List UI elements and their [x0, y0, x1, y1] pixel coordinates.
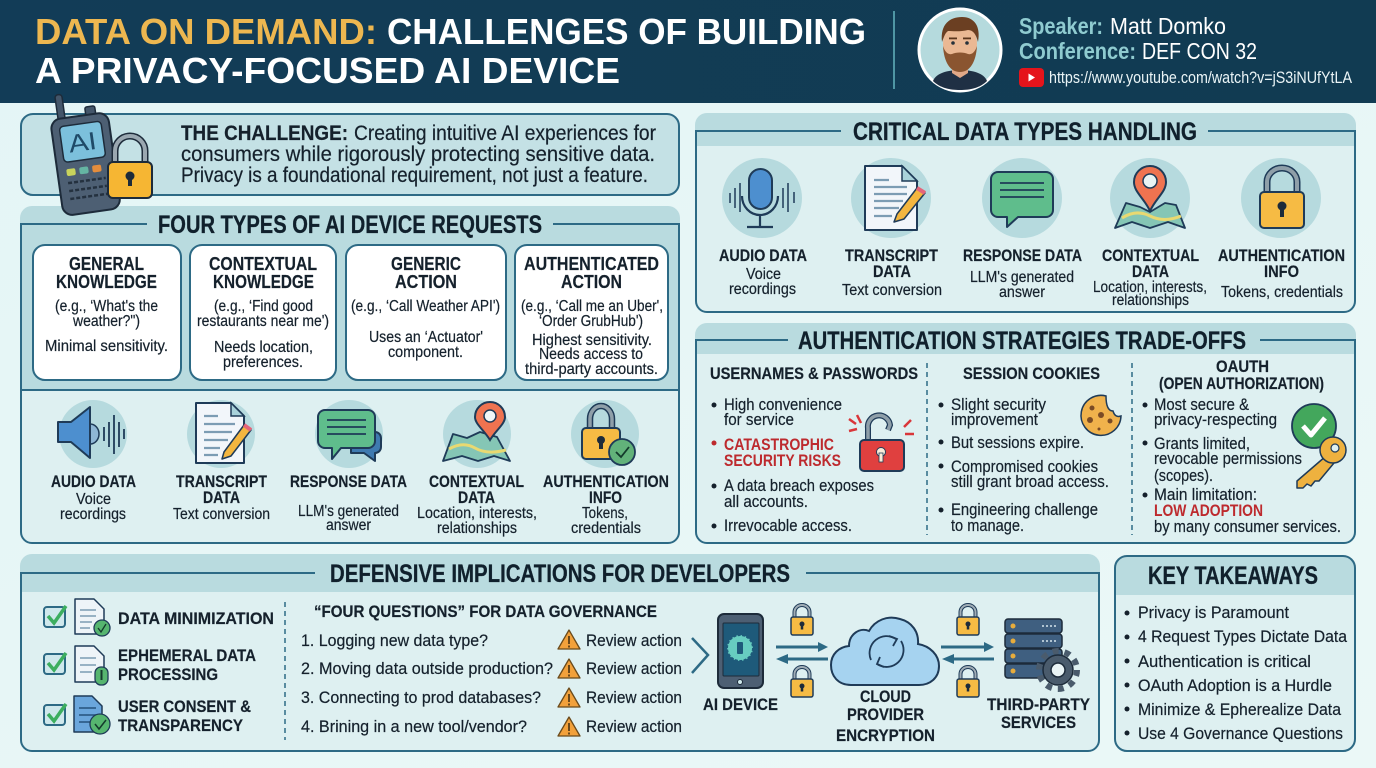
- speaker details: Conference:: [1019, 38, 1136, 64]
- speaker details: DEF CON 32: [1142, 38, 1257, 64]
- icon: third-party servers: SERVICES: [1001, 713, 1076, 732]
- column: usernames and passwords: USERNAMES & PASSWORDS: [710, 364, 918, 383]
- four questions checklist: Review action: [586, 718, 682, 736]
- card: contextual knowledge: restaurants near me'): [197, 313, 329, 330]
- header banner: [0, 0, 1376, 103]
- arrows: device to cloud: [776, 642, 828, 664]
- card: authenticated action: ACTION: [561, 271, 622, 292]
- card: generic action: [346, 245, 506, 380]
- four questions checklist: 3. Connecting to prod databases?: [301, 689, 541, 707]
- column: session cookies: But sessions expire.: [951, 434, 1084, 452]
- item: contextual data: [417, 400, 537, 537]
- challenge text: Creating intuitive AI experiences for: [354, 122, 656, 145]
- four questions checklist: Review action: [586, 689, 682, 707]
- practice: user consent and transparency: USER CONSENT &: [118, 697, 251, 716]
- icon: lock lower left: [791, 667, 813, 697]
- speaker details: Matt Domko: [1110, 13, 1226, 39]
- takeaway list: Privacy is Paramount: [1138, 604, 1289, 622]
- item: transcript data: DATA: [203, 488, 240, 507]
- item: authentication info: Tokens, credentials: [1221, 284, 1343, 301]
- column: oauth: revocable permissions: [1154, 450, 1302, 468]
- title: [35, 11, 866, 91]
- item: audio data: Voice: [76, 491, 111, 508]
- heading: AUTHENTICATION STRATEGIES TRADE-OFFS: [798, 327, 1246, 355]
- heading: DEFENSIVE IMPLICATIONS FOR DEVELOPERS: [330, 560, 790, 588]
- item: audio data: [51, 400, 136, 523]
- column: oauth: privacy-respecting: [1154, 411, 1277, 429]
- four questions checklist: [301, 602, 682, 736]
- item: transcript data: [842, 158, 942, 299]
- icon: AI walkie-talkie with padlock: [47, 88, 152, 216]
- takeaway list: [1124, 604, 1348, 743]
- card: general knowledge: weather?"): [72, 313, 140, 330]
- item: transcript data: TRANSCRIPT: [176, 472, 268, 491]
- item: audio data: [719, 158, 807, 298]
- item: response data: [963, 158, 1082, 301]
- column: oauth: Most secure &: [1154, 396, 1249, 414]
- card: general knowledge: Minimal sensitivity.: [45, 338, 168, 355]
- heading: KEY TAKEAWAYS: [1148, 562, 1318, 590]
- icon: youtube: [1019, 68, 1044, 87]
- card: contextual knowledge: [190, 245, 336, 380]
- panel: authentication strategies trade-offs: [695, 323, 1356, 544]
- item: contextual data: Location, interests,: [417, 505, 537, 522]
- column: usernames and passwords: CATASTROPHIC: [724, 435, 834, 454]
- column: usernames and passwords: [710, 364, 918, 535]
- item: authentication info: AUTHENTICATION: [543, 472, 669, 491]
- title: CHALLENGES OF BUILDING: [387, 11, 866, 52]
- icon: lock lower right: [957, 667, 979, 697]
- takeaway list: Minimize & Epherealize Data: [1138, 701, 1342, 719]
- column: usernames and passwords: for service: [724, 411, 794, 429]
- item: response data: answer: [326, 517, 371, 534]
- challenge text: [181, 122, 656, 187]
- item: contextual data: relationships: [437, 520, 517, 537]
- column: session cookies: [938, 364, 1121, 535]
- item: authentication info: Tokens,: [582, 505, 628, 522]
- panel: key takeaways: [1115, 556, 1355, 751]
- item: authentication info: INFO: [589, 488, 622, 507]
- card: contextual knowledge: (e.g., ‘Find good: [214, 298, 313, 315]
- column: oauth: (OPEN AUTHORIZATION): [1159, 374, 1324, 393]
- practice: ephemeral data processing: [44, 646, 256, 685]
- card: contextual knowledge: Needs location,: [214, 339, 313, 356]
- icon: cloud: ENCRYPTION: [836, 726, 935, 745]
- icon: lock upper left: [791, 605, 813, 635]
- icon: third-party servers: THIRD-PARTY: [987, 695, 1091, 714]
- practice: data minimization: [44, 599, 274, 636]
- icon: cloud: [831, 618, 939, 745]
- four questions checklist: 1. Logging new data type?: [301, 632, 488, 650]
- item: contextual data: Location, interests,: [1093, 279, 1207, 296]
- panel: defensive implications for developers: [20, 554, 1100, 752]
- takeaway list: Authentication is critical: [1138, 653, 1311, 671]
- title: DATA ON DEMAND:: [35, 11, 377, 52]
- icon: cloud: CLOUD: [860, 687, 911, 706]
- four questions checklist: Review action: [586, 632, 682, 650]
- panel: four types of AI device requests: [20, 206, 680, 544]
- icon: cookie: [1081, 395, 1121, 435]
- challenge text: Privacy is a foundational requirement, not just a feature.: [181, 164, 648, 187]
- challenge text: THE CHALLENGE:: [181, 122, 348, 145]
- item: audio data: recordings: [60, 506, 126, 523]
- column: usernames and passwords: all accounts.: [724, 493, 808, 511]
- column: session cookies: Slight security: [951, 396, 1047, 414]
- icon: lock upper right: [957, 605, 979, 635]
- item: response data: RESPONSE DATA: [290, 472, 407, 491]
- card: contextual knowledge: preferences.: [223, 354, 303, 371]
- item: audio data: AUDIO DATA: [719, 246, 807, 265]
- icon: gold key: [1297, 437, 1346, 488]
- speaker details: [1019, 13, 1257, 64]
- item: audio data: AUDIO DATA: [51, 472, 136, 491]
- card: authenticated action: third-party accounts.: [525, 361, 658, 378]
- card: generic action: ACTION: [395, 271, 457, 292]
- card: generic action: (e.g., ‘Call Weather API'): [351, 298, 500, 315]
- icon: speaker portrait: [919, 9, 1001, 91]
- card: contextual knowledge: KNOWLEDGE: [213, 271, 314, 292]
- icon: warning triangles: [558, 630, 580, 736]
- card: authenticated action: ‘Order GrubHub'): [539, 313, 643, 330]
- heading: CRITICAL DATA TYPES HANDLING: [853, 118, 1197, 146]
- icon: broken padlock: [849, 415, 914, 471]
- item: audio data: Voice: [746, 266, 781, 283]
- column: session cookies: improvement: [951, 411, 1038, 429]
- item: transcript data: [173, 400, 270, 523]
- four questions checklist: 2. Moving data outside production?: [301, 660, 553, 678]
- card: general knowledge: GENERAL: [69, 253, 144, 274]
- item: contextual data: DATA: [1132, 262, 1169, 281]
- column: usernames and passwords: High convenience: [724, 396, 842, 414]
- practice: data minimization: DATA MINIMIZATION: [118, 609, 274, 628]
- practice: ephemeral data processing: EPHEMERAL DATA: [118, 646, 256, 665]
- item: transcript data: TRANSCRIPT: [845, 246, 939, 265]
- takeaway list: 4 Request Types Dictate Data: [1138, 628, 1348, 646]
- icon: third-party servers: [987, 619, 1091, 732]
- card: general knowledge: KNOWLEDGE: [56, 271, 157, 292]
- card: authenticated action: AUTHENTICATED: [524, 253, 659, 274]
- card: generic action: component.: [388, 344, 463, 361]
- item: response data: LLM's generated: [298, 503, 399, 520]
- takeaway list: Use 4 Governance Questions: [1138, 725, 1343, 743]
- card: generic action: Uses an ‘Actuator': [369, 329, 483, 346]
- practice: user consent and transparency: TRANSPARENCY: [118, 716, 244, 735]
- item: response data: RESPONSE DATA: [963, 246, 1082, 265]
- item: authentication info: INFO: [1264, 262, 1299, 281]
- arrow: chevron: [692, 638, 708, 673]
- item: transcript data: Text conversion: [173, 506, 270, 523]
- item: contextual data: [1093, 158, 1207, 309]
- takeaway list: OAuth Adoption is a Hurdle: [1138, 677, 1332, 695]
- column: usernames and passwords: A data breach exposes: [724, 477, 874, 495]
- column: session cookies: Compromised cookies: [951, 458, 1098, 476]
- four questions checklist: “FOUR QUESTIONS” FOR DATA GOVERNANCE: [314, 602, 657, 621]
- item: authentication info: AUTHENTICATION: [1218, 246, 1345, 265]
- column: usernames and passwords: SECURITY RISKS: [724, 451, 841, 470]
- arrows: cloud to third-party: [941, 642, 994, 664]
- card: authenticated action: (e.g., ‘Call me an Uber',: [521, 298, 663, 315]
- panel: the challenge: [21, 114, 679, 195]
- column: oauth: (scopes).: [1154, 467, 1213, 485]
- practice: user consent and transparency: [44, 696, 251, 735]
- column: session cookies: still grant broad access.: [951, 473, 1109, 491]
- item: contextual data: CONTEXTUAL: [1102, 246, 1199, 265]
- panel: critical data types handling: [695, 113, 1356, 313]
- item: authentication info: credentials: [571, 520, 641, 537]
- column: oauth: Grants limited,: [1154, 435, 1250, 453]
- item: response data: LLM's generated: [970, 269, 1074, 286]
- column: oauth: OAUTH: [1216, 357, 1269, 376]
- item: transcript data: Text conversion: [842, 282, 942, 299]
- item: contextual data: DATA: [458, 488, 495, 507]
- item: contextual data: relationships: [1112, 292, 1189, 309]
- column: oauth: Main limitation:: [1154, 486, 1257, 504]
- item: transcript data: DATA: [873, 262, 911, 281]
- card: authenticated action: Highest sensitivity.: [532, 332, 652, 349]
- title: A PRIVACY-FOCUSED AI DEVICE: [35, 50, 620, 91]
- column: session cookies: SESSION COOKIES: [963, 364, 1100, 383]
- card: authenticated action: [515, 245, 668, 380]
- practice: ephemeral data processing: PROCESSING: [118, 665, 218, 684]
- heading: FOUR TYPES OF AI DEVICE REQUESTS: [158, 211, 542, 239]
- icon: AI walkie-talkie with padlock: AI: [67, 127, 98, 159]
- icon: AI device: AI DEVICE: [703, 695, 778, 714]
- column: session cookies: Engineering challenge: [951, 501, 1098, 519]
- icon: check badge: [1292, 404, 1336, 448]
- icon: cloud: PROVIDER: [847, 705, 924, 724]
- item: audio data: recordings: [729, 281, 796, 298]
- challenge text: consumers while rigorously protecting sensitive data.: [181, 143, 655, 166]
- item: authentication info: [543, 400, 669, 537]
- card: general knowledge: (e.g., ‘What's the: [55, 298, 158, 315]
- card: generic action: GENERIC: [391, 253, 461, 274]
- column: oauth: [1142, 357, 1346, 536]
- column: oauth: LOW ADOPTION: [1154, 501, 1263, 520]
- item: response data: answer: [999, 284, 1045, 301]
- item: authentication info: [1218, 158, 1345, 301]
- icon: AI device: [703, 614, 778, 714]
- column: oauth: by many consumer services.: [1154, 518, 1341, 536]
- card: authenticated action: Needs access to: [539, 346, 643, 363]
- column: usernames and passwords: Irrevocable access.: [724, 517, 852, 535]
- four questions checklist: 4. Brining in a new tool/vendor?: [301, 718, 527, 736]
- item: response data: [290, 400, 407, 534]
- card: general knowledge: [33, 245, 181, 380]
- item: contextual data: CONTEXTUAL: [429, 472, 524, 491]
- four questions checklist: Review action: [586, 660, 682, 678]
- speaker details: Speaker:: [1019, 13, 1103, 39]
- card: contextual knowledge: CONTEXTUAL: [209, 253, 317, 274]
- column: session cookies: to manage.: [951, 517, 1024, 535]
